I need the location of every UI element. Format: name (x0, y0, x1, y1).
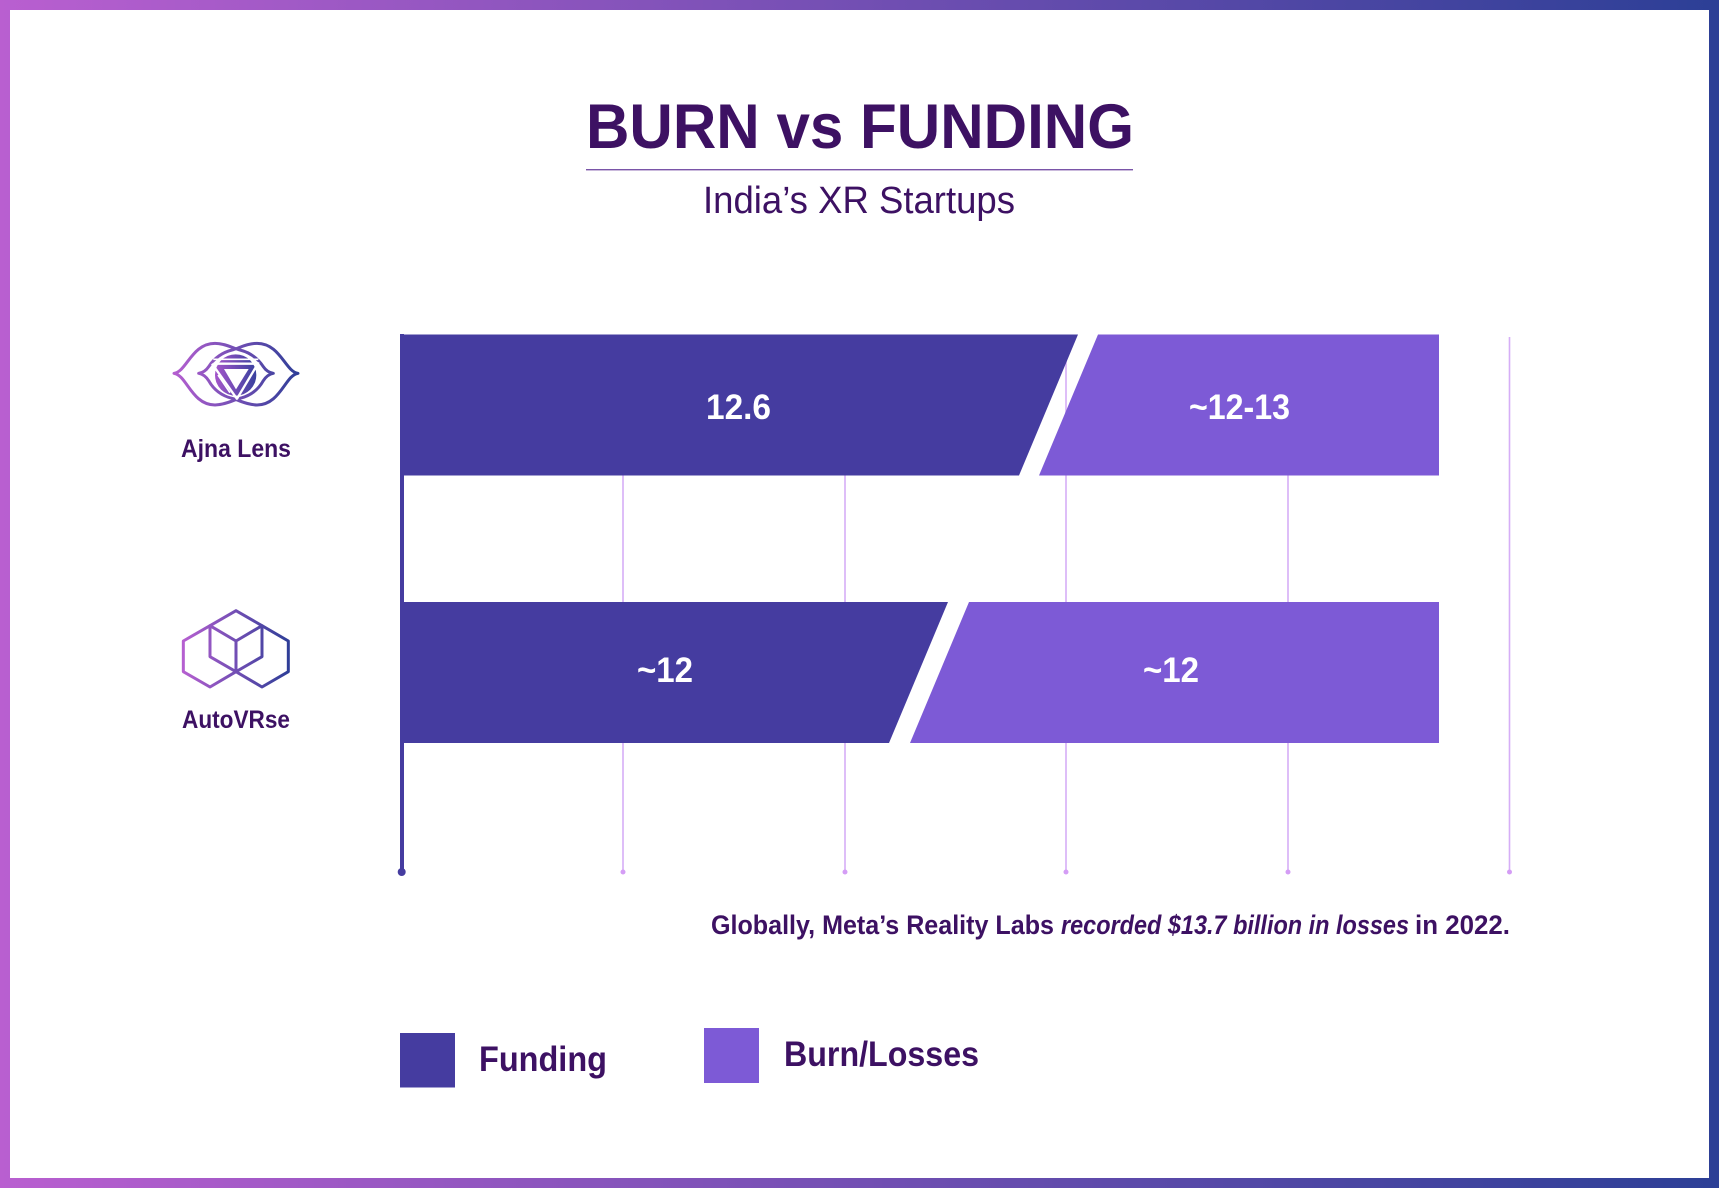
label: AutoVRse: AutoVRse (182, 706, 290, 734)
note: Globally, Meta’s Reality Labs (711, 910, 1054, 940)
grid lines (620, 337, 1512, 874)
bar: Ajna Lens funding (400, 334, 1078, 476)
bar: Ajna Lens burn (1039, 334, 1439, 476)
subtitle: India’s XR Startups (703, 180, 1015, 222)
bar: AutoVRse funding (403, 602, 948, 743)
legend: funding: Funding (479, 1040, 607, 1079)
value: ~12: ~12 (1143, 651, 1199, 690)
value: ~12-13: ~12-13 (1189, 388, 1290, 427)
title: BURN vs FUNDING (586, 92, 1134, 162)
note (711, 910, 1510, 940)
bar: AutoVRse burn (910, 602, 1439, 743)
vertical axis (398, 334, 406, 876)
note: in 2022. (1415, 910, 1510, 940)
legend: burn/losses (704, 1028, 979, 1083)
icon: AutoVRse logo (183, 611, 288, 687)
legend: funding (400, 1033, 607, 1088)
value: 12.6: 12.6 (706, 388, 771, 427)
triangle emblem (212, 353, 259, 399)
label: Ajna Lens: Ajna Lens (181, 435, 291, 463)
note: recorded $13.7 billion in losses (1061, 910, 1409, 940)
legend: burn/losses: Burn/Losses (784, 1035, 979, 1074)
icon: Ajna Lens logo (174, 343, 298, 405)
value: ~12: ~12 (637, 651, 693, 690)
chart (398, 334, 1512, 876)
title underline (586, 169, 1133, 170)
